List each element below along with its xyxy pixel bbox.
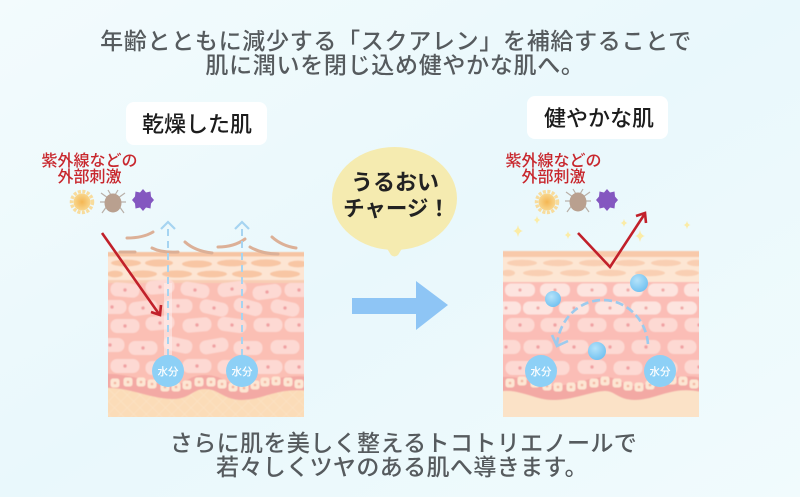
icon: mite left: [100, 190, 126, 213]
panel: dry skin diagram: [108, 252, 304, 417]
closing text: さらに肌を美しく整えるトコトリエノールで: [170, 430, 637, 456]
moisture escaping arrows: [161, 222, 249, 356]
label: dry skin: [126, 102, 267, 145]
heading: 肌に潤いを閉じ込め健やかな肌へ。: [205, 52, 585, 78]
label: healthy skin: [527, 96, 668, 139]
water bubbles left: 水分: [232, 365, 253, 378]
label: healthy skin: 健やかな肌: [544, 106, 654, 131]
water bubbles left: 水分: [158, 365, 179, 378]
circulating moisture arrow: [552, 300, 648, 346]
water bubbles left: [152, 355, 258, 387]
arrow: left to right: [352, 281, 448, 330]
dermis cells: [503, 283, 699, 376]
icon: virus right: [596, 189, 618, 211]
callout: moisture charge: チャージ！: [343, 197, 450, 221]
peeling skin flakes: [120, 232, 296, 254]
dermis cells: [108, 280, 304, 376]
icon: sun right: [536, 192, 558, 212]
dermis background: [503, 282, 699, 386]
horny layer: [495, 251, 707, 282]
water bubbles right: [525, 355, 676, 387]
red label left: 紫外線などの: [41, 152, 138, 170]
icon: sun left: [72, 192, 92, 212]
label: dry skin: 乾燥した肌: [142, 112, 252, 137]
red arrow penetrating dry skin: [102, 233, 161, 315]
closing text: [170, 430, 637, 480]
water droplets: [545, 274, 648, 360]
sparkles: [513, 216, 690, 242]
basal layer: [495, 376, 707, 393]
callout: moisture charge: うるおい: [351, 170, 439, 195]
red label right: [505, 152, 602, 186]
heading: [100, 28, 692, 78]
red arrow reflected by healthy skin: [578, 213, 646, 267]
panel: healthy skin diagram: [503, 250, 699, 417]
dermis background: [108, 282, 304, 386]
callout: moisture charge: [332, 147, 457, 256]
fat layer: [108, 387, 304, 417]
horny layer: [100, 252, 312, 283]
red label left: [41, 152, 138, 186]
fat layer: [503, 390, 699, 417]
red label right: 外部刺激: [521, 168, 586, 186]
heading: 年齢とともに減少する「スクアレン」を補給することで: [100, 28, 692, 54]
red label right: 紫外線などの: [505, 152, 602, 170]
icon: mite right: [565, 189, 591, 212]
closing text: 若々しくツヤのある肌へ導きます。: [216, 454, 588, 480]
basal layer: [100, 376, 312, 393]
icon: virus left: [132, 189, 154, 211]
red label left: 外部刺激: [57, 168, 122, 186]
water bubbles right: 水分: [530, 365, 552, 378]
water bubbles right: 水分: [650, 365, 671, 378]
